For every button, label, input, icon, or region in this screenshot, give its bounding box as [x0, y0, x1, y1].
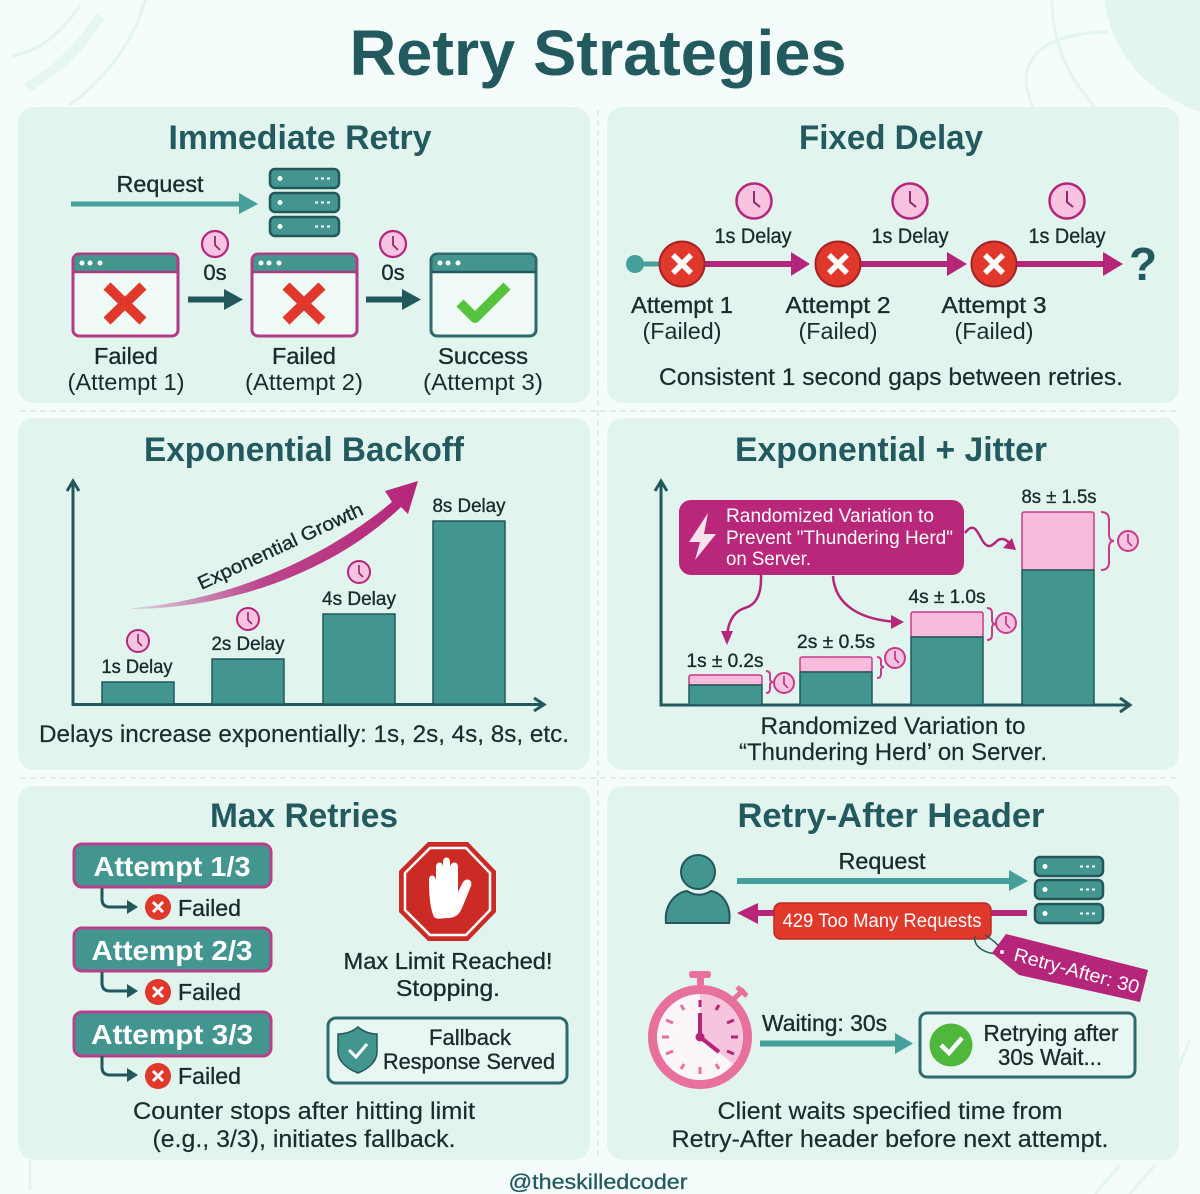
retry-after tag: Retry-After: 30	[1011, 945, 1141, 999]
braces	[766, 512, 1114, 693]
callout: Randomized Variation to	[726, 506, 934, 527]
heading: exponential + jitter: Exponential + Jitter	[735, 431, 1047, 469]
success window	[431, 254, 536, 336]
tag string	[975, 935, 1001, 954]
growth arrow	[132, 481, 418, 609]
attempt labels	[631, 292, 1046, 344]
delay labels: 1s Delay	[872, 225, 949, 248]
delay arrows	[700, 252, 1123, 276]
icon: stop sign	[399, 842, 496, 941]
status labels: Success	[438, 343, 528, 369]
axes	[67, 481, 544, 711]
caption: Counter stops after hitting limit	[133, 1098, 475, 1125]
bar labels: 2s Delay	[212, 634, 285, 655]
delay labels: 1s Delay	[714, 225, 792, 248]
bars	[102, 521, 505, 704]
failed icons	[145, 894, 171, 1089]
attempt labels: Attempt 2	[786, 292, 890, 318]
delay labels	[714, 225, 1106, 248]
failed labels: Failed	[178, 895, 241, 921]
failed labels	[178, 895, 241, 1089]
attempt labels: Attempt 1/3	[94, 851, 250, 882]
retry-after tag	[992, 934, 1148, 1002]
caption: (e.g., 3/3), initiates fallback.	[152, 1126, 456, 1153]
attempt labels: Attempt 3/3	[91, 1019, 253, 1050]
axes	[655, 481, 1130, 712]
icon: client	[666, 855, 730, 923]
status labels: (Attempt 3)	[423, 369, 543, 395]
fallback box: Response Served	[383, 1049, 555, 1074]
heading: retry-after header: Retry-After Header	[738, 797, 1044, 835]
response arrow	[737, 903, 1027, 924]
arrow	[188, 289, 243, 310]
icon: lightning	[689, 513, 716, 560]
bar labels: 4s ± 1.0s	[908, 587, 986, 608]
bar labels: 2s ± 0.5s	[797, 632, 875, 653]
panel: fixed delay	[607, 107, 1179, 403]
question mark: ?	[1129, 238, 1157, 290]
elbow arrow heads	[127, 900, 138, 1082]
icon: server	[1035, 857, 1103, 923]
failed labels: Failed	[178, 1063, 241, 1089]
attempt labels: Attempt 1	[631, 292, 733, 318]
request label: Request	[116, 171, 204, 197]
failed window 1	[73, 254, 178, 336]
delay label: 0s	[381, 260, 405, 285]
delay label: 0s	[203, 260, 227, 285]
status labels: (Attempt 2)	[245, 369, 363, 395]
waiting arrow	[760, 1033, 913, 1054]
panel: exponential + jitter	[607, 418, 1179, 770]
failed labels: Failed	[178, 979, 241, 1005]
footer credit: @theskilledcoder	[508, 1171, 688, 1194]
callout: on Server.	[726, 549, 811, 570]
fallback box: Fallback	[429, 1025, 512, 1050]
stop message: Stopping.	[396, 975, 500, 1001]
clocks	[736, 184, 1084, 218]
start dot	[626, 255, 662, 273]
jitter bars	[689, 512, 1094, 705]
bar labels	[686, 487, 1096, 672]
fallback box	[328, 1018, 567, 1083]
panel: exponential backoff	[18, 418, 590, 770]
attempt labels	[91, 851, 253, 1050]
error badge: 429 Too Many Requests	[782, 911, 982, 932]
status labels: Failed	[94, 343, 158, 369]
retry box: Retrying after	[984, 1020, 1119, 1046]
clocks	[774, 531, 1138, 693]
attempt boxes	[74, 844, 271, 1056]
failed window 2	[252, 254, 357, 336]
caption: Randomized Variation to	[760, 713, 1026, 740]
icon: server	[270, 169, 339, 236]
caption: Consistent 1 second gaps between retries.	[659, 364, 1123, 391]
bar labels: 8s ± 1.5s	[1022, 487, 1096, 508]
retry box: 30s Wait...	[998, 1044, 1102, 1070]
stop message	[344, 948, 552, 1001]
heading: immediate retry: Immediate Retry	[168, 119, 432, 157]
icon: stopwatch	[652, 971, 748, 1084]
bar labels: 4s Delay	[322, 589, 397, 610]
bar labels	[102, 496, 506, 678]
icon: shield	[338, 1027, 377, 1073]
heading: fixed delay: Fixed Delay	[799, 119, 983, 157]
elbow arrows	[102, 888, 130, 1075]
callout: Prevent "Thundering Herd"	[726, 528, 953, 549]
icon: clock	[202, 231, 228, 257]
connector arrows	[727, 528, 1012, 640]
title: Retry Strategies	[350, 17, 846, 89]
callout	[679, 500, 964, 575]
waiting label: Waiting: 30s	[762, 1010, 887, 1036]
panel: max retries	[18, 786, 590, 1160]
caption: Retry-After header before next attempt.	[672, 1126, 1108, 1153]
clocks	[127, 561, 370, 652]
caption: “Thundering Herd’ on Server.	[739, 739, 1047, 766]
caption	[739, 713, 1047, 766]
caption: Delays increase exponentially: 1s, 2s, 4s, 8s, etc.	[39, 721, 569, 748]
caption	[133, 1098, 475, 1153]
status labels	[68, 343, 543, 395]
heading: max retries: Max Retries	[210, 797, 398, 835]
status labels: Failed	[272, 343, 336, 369]
attempt labels: (Failed)	[642, 318, 722, 344]
connector heads	[721, 538, 1016, 645]
caption	[672, 1098, 1108, 1153]
attempt labels: (Failed)	[954, 318, 1034, 344]
growth label: Exponential Growth	[195, 499, 367, 595]
attempt labels: Attempt 3	[942, 292, 1046, 318]
panel: retry-after header	[607, 786, 1179, 1160]
delay labels: 1s Delay	[1028, 225, 1106, 248]
attempt labels: Attempt 2/3	[92, 935, 252, 966]
request arrow	[737, 870, 1028, 891]
attempt labels: (Failed)	[798, 318, 878, 344]
panel: immediate retry	[18, 107, 590, 403]
icon: hand	[429, 858, 471, 919]
request arrow	[71, 193, 258, 214]
icon: check	[930, 1024, 972, 1066]
bar labels: 1s Delay	[102, 657, 173, 678]
heading: exponential backoff: Exponential Backoff	[144, 431, 465, 469]
status labels: (Attempt 1)	[68, 369, 184, 395]
failed markers	[660, 242, 1016, 286]
bar labels: 1s ± 0.2s	[686, 651, 764, 672]
request label: Request	[838, 848, 926, 874]
arrow	[366, 289, 421, 310]
stop message: Max Limit Reached!	[344, 948, 552, 974]
error badge	[774, 903, 991, 939]
caption: Client waits specified time from	[718, 1098, 1062, 1125]
bar labels: 8s Delay	[432, 496, 506, 517]
icon: clock	[380, 231, 406, 257]
retry box	[920, 1013, 1135, 1077]
